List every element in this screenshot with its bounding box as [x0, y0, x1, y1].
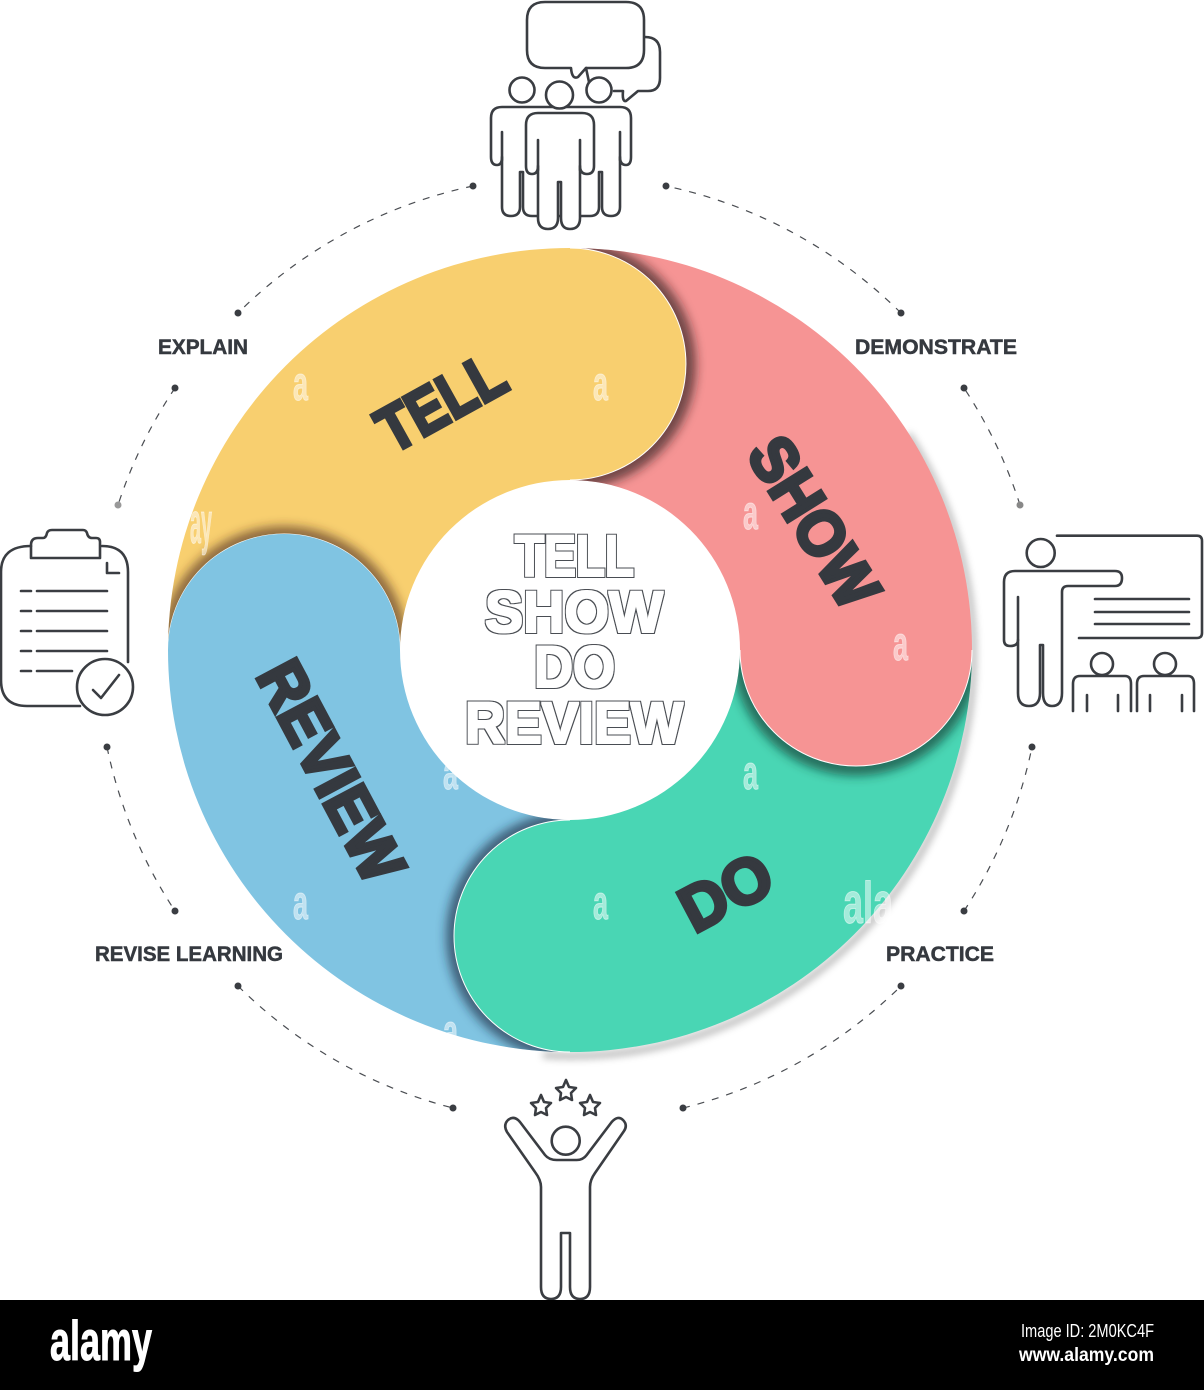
watermark marks: a [293, 877, 308, 930]
label: explain: EXPLAIN [158, 336, 248, 359]
dashed ring segments [104, 182, 1036, 1112]
watermark marks: a [593, 877, 608, 930]
center title: TELL [515, 524, 634, 589]
label: practice: PRACTICE [886, 943, 994, 966]
center title [465, 524, 683, 756]
icon: clipboard with check [1, 530, 133, 715]
footer logo: alamy [50, 1309, 152, 1372]
do label: DO [667, 838, 785, 946]
panel: tell [168, 248, 686, 646]
watermark marks: ala [843, 871, 893, 936]
center title: REVIEW [465, 691, 683, 756]
watermark marks [190, 358, 908, 1059]
watermark marks: a [743, 487, 758, 540]
footer bar [0, 1300, 1204, 1390]
watermark marks: a [593, 358, 608, 411]
icon: person with stars [505, 1080, 626, 1299]
watermark marks: a [893, 618, 908, 671]
watermark marks: a [293, 358, 308, 411]
label: revise learning: REVISE LEARNING [95, 943, 283, 966]
panel: review [168, 534, 570, 1052]
review label: REVIEW [243, 648, 419, 894]
panel: show [570, 248, 972, 766]
ring outer shadow [543, 434, 974, 1056]
watermark marks: a [443, 1006, 458, 1059]
icon: presenter with audience [1004, 536, 1202, 711]
panel: do [454, 650, 972, 1052]
watermark marks: a [443, 747, 458, 800]
show label: SHOW [734, 423, 895, 621]
watermark marks: ay [190, 491, 212, 556]
icon: group with speech bubbles [491, 2, 660, 229]
image id: Image ID: 2M0KC4F [1021, 1321, 1154, 1341]
footer url: www.alamy.com [1018, 1345, 1154, 1366]
center title: SHOW [485, 580, 663, 645]
watermark marks: a [743, 747, 758, 800]
label: demonstrate: DEMONSTRATE [855, 336, 1017, 359]
center title: DO [534, 635, 615, 700]
tell label: TELL [364, 338, 518, 466]
